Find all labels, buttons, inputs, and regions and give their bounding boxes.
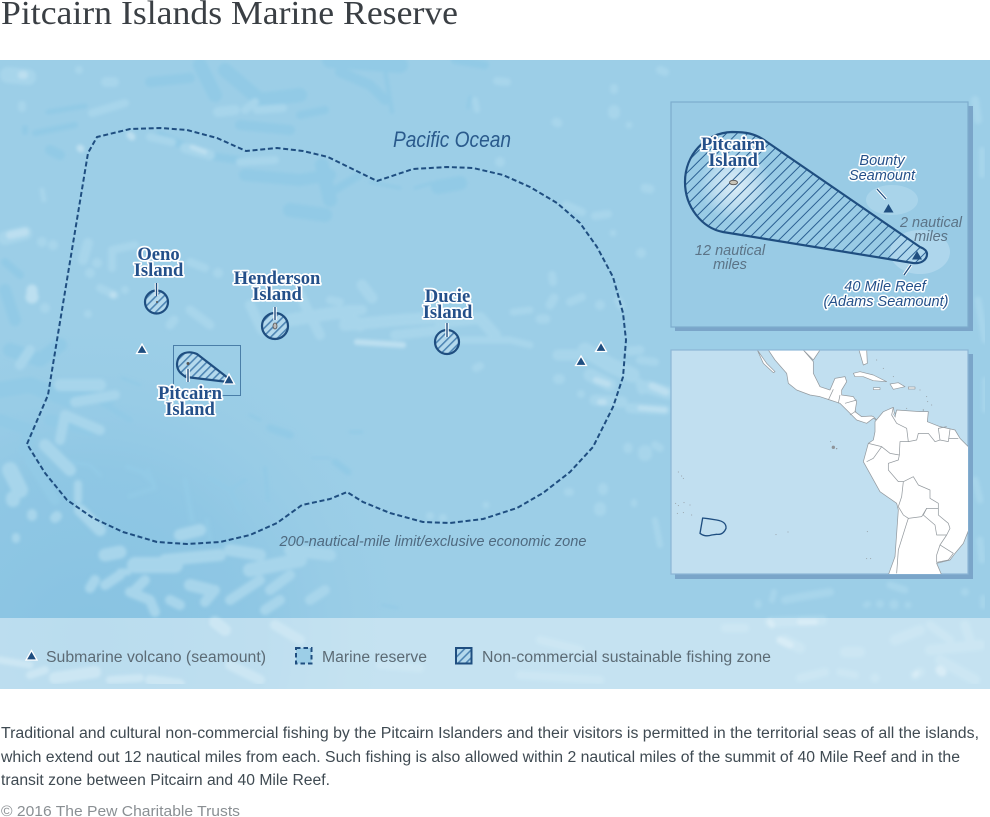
light zones xyxy=(699,149,771,221)
label: 40 Mile Reef xyxy=(824,279,948,310)
island: Pitcairn with inset locator: Pitcairn xyxy=(158,383,223,404)
label: 2 nautical miles xyxy=(899,215,963,245)
label: Pitcairn Island xyxy=(701,134,766,171)
island: Oeno: Island xyxy=(134,260,184,281)
label: 40 Mile Reef: 40 Mile Reef xyxy=(844,279,928,295)
lake xyxy=(893,413,895,417)
island: Henderson: Island xyxy=(252,284,302,305)
label: 12 nautical miles: miles xyxy=(713,257,747,273)
label: 2 nautical miles: 2 nautical xyxy=(899,215,963,231)
label: 12 nautical miles xyxy=(695,243,766,273)
South America xyxy=(863,407,970,575)
label: 40 Mile Reef: (Adams Seamount) xyxy=(824,294,948,310)
legend: seamount: Submarine volcano (seamount) xyxy=(46,649,266,666)
description text: transit zone between Pitcairn and 40 Mile Reef. xyxy=(1,772,330,789)
small islands xyxy=(675,359,932,559)
island: Ducie xyxy=(423,286,473,354)
island: Ducie: Island xyxy=(423,302,473,323)
transit zone hatch xyxy=(685,132,927,263)
label: Pacific Ocean: Pacific Ocean xyxy=(393,127,511,152)
legend xyxy=(26,648,771,666)
label: Bounty Seamount: Seamount xyxy=(849,168,916,184)
USA coast and Florida xyxy=(803,350,867,365)
Baja xyxy=(757,350,775,373)
island: Pitcairn with inset locator: Island xyxy=(165,399,215,420)
boundary: 200-nautical-mile limit xyxy=(27,128,626,544)
Mexico and Central America xyxy=(768,350,877,423)
Caribbean xyxy=(853,372,915,390)
label: Pitcairn Island: Island xyxy=(708,150,758,171)
island: Henderson xyxy=(234,268,321,339)
Pitcairn islet xyxy=(730,180,738,185)
label: 12 nautical miles: 12 nautical xyxy=(695,243,766,259)
label: 2 nautical miles: miles xyxy=(914,229,948,245)
Borders xyxy=(828,389,958,573)
island: Pitcairn with inset locator xyxy=(158,346,240,420)
island: Henderson: Henderson xyxy=(234,268,321,289)
label: EEZ limit: 200-nautical-mile limit/exclusive economic zone xyxy=(278,534,586,550)
label: Bounty Seamount: Bounty xyxy=(859,153,905,169)
legend: fishing zone: Non-commercial sustainable fishing zone xyxy=(482,649,771,666)
island: Oeno xyxy=(134,244,184,314)
description text: which extend out 12 nautical miles from each. Such fishing is also allowed within 2 nautical miles of the summit of 40 Mile Reef and in the xyxy=(0,749,960,766)
label: Bounty Seamount xyxy=(849,153,916,212)
40 Mile Reef marker xyxy=(912,251,922,260)
island: Ducie: Ducie xyxy=(425,286,470,307)
panel: locator map xyxy=(671,350,973,579)
seamount markers xyxy=(136,342,606,366)
panel: Pitcairn detail inset xyxy=(671,102,973,331)
legend band xyxy=(0,618,990,689)
seafloor shading xyxy=(0,60,985,684)
reserve outline xyxy=(700,518,726,536)
label: Pitcairn Island: Pitcairn xyxy=(701,134,766,155)
description text xyxy=(0,725,979,789)
description text: Traditional and cultural non-commercial fishing by the Pitcairn Islanders and their visitors is permitted in the territorial seas of all the islands, xyxy=(1,725,979,742)
island: Oeno: Oeno xyxy=(137,244,180,265)
legend: marine reserve: Marine reserve xyxy=(322,649,427,666)
panel: ocean map xyxy=(0,60,990,689)
